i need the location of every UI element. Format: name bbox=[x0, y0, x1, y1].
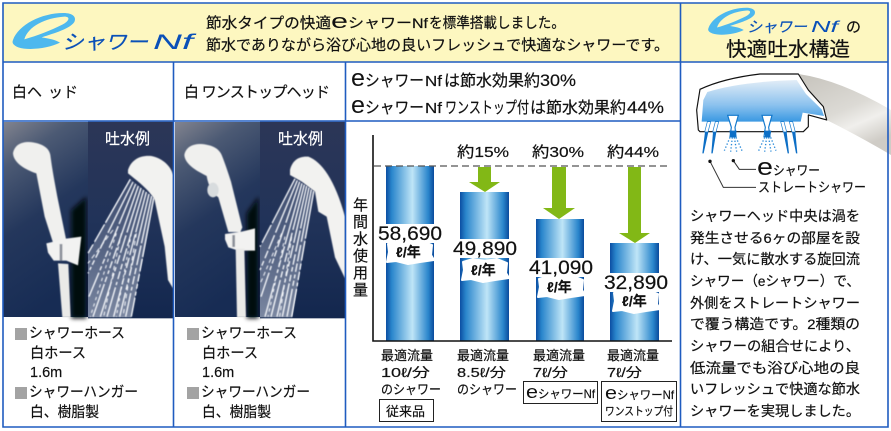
text: structure description: いフレッシュで快適な節水 bbox=[690, 381, 860, 397]
text: structure description: シャワーヘッド中央は渦を bbox=[690, 208, 860, 224]
value: 32,890: ℓ/年 bbox=[622, 293, 647, 309]
value: 58,690 bbox=[378, 224, 442, 264]
text: white head specs: 1.6m bbox=[30, 365, 62, 381]
panel: header banner bbox=[3, 3, 680, 62]
text: structure description: 発生させる6ヶの部屋を設 bbox=[690, 230, 860, 246]
text: water saving summary: 30% bbox=[540, 71, 576, 90]
icon: small logo: Nf bbox=[811, 19, 841, 36]
bar: 従来品 58,690 bbox=[386, 166, 434, 341]
label: 吐水例: 吐水例 bbox=[278, 130, 323, 148]
text: one-stop head specs: シャワーホース bbox=[201, 326, 297, 342]
arrow: 44% reduction bbox=[619, 167, 650, 243]
panel: right header bbox=[681, 3, 888, 62]
photo: white one-stop head shower bbox=[175, 122, 345, 318]
value: 49,890: ℓ/年 bbox=[471, 262, 496, 278]
label: 吐水例: 吐水例 bbox=[105, 130, 150, 148]
icon: gray handle bbox=[798, 74, 891, 155]
icon: spraying head bbox=[128, 156, 173, 288]
label: y axis title: 間 bbox=[353, 214, 368, 231]
label: eシャワーNf one-stop: e bbox=[605, 383, 617, 403]
text: one-stop head specs: シャワーハンガー bbox=[201, 384, 310, 401]
bar: eシャワーNf 41,090 bbox=[536, 219, 584, 341]
photo: white head shower bbox=[3, 122, 173, 318]
label: y axis title: 量 bbox=[353, 282, 368, 299]
leader lines bbox=[710, 161, 756, 187]
label: y axis title: 使 bbox=[353, 248, 368, 265]
text: water saving summary: Nf bbox=[425, 100, 443, 117]
label: conventional shower: のシャワー bbox=[381, 382, 441, 397]
label: eシャワー: e bbox=[757, 154, 773, 181]
text: one-stop head specs: 1.6m bbox=[202, 365, 234, 381]
text: white head specs: 白ホース bbox=[30, 345, 86, 362]
text: structure description: シャワーの組合せにより、 bbox=[690, 338, 860, 354]
text: structure description: 低流量でも浴び心地の良 bbox=[690, 360, 860, 376]
text: structure description: シャワー（eシャワー）で、 bbox=[690, 273, 860, 289]
label: y axis title: 用 bbox=[353, 265, 368, 282]
label: 8.5 L/min shower bbox=[457, 348, 517, 397]
label: conventional shower: 従来品 bbox=[386, 404, 425, 419]
label: eシャワーNf one-stop: 最適流量 bbox=[607, 348, 659, 363]
text: water saving summary: シャワー bbox=[365, 73, 424, 90]
icon: water chamber bbox=[702, 80, 824, 122]
label: eシャワーNf: 7ℓ/分 bbox=[533, 365, 568, 380]
text: water saving summary: は節水効果約 bbox=[444, 72, 540, 90]
text: header description: e bbox=[331, 11, 348, 33]
label: eシャワーNf: シャワーNf bbox=[538, 387, 596, 401]
label: y axis title: 水 bbox=[353, 231, 368, 248]
text: water saving summary: e bbox=[351, 92, 365, 119]
text: header description: シャワーNf bbox=[348, 15, 428, 31]
value: 49,890: 49,890 bbox=[453, 239, 517, 260]
text: header description: を標準搭載しました。 bbox=[429, 14, 565, 32]
text: header description: 節水でありながら浴び心地の良いフレッシュで快適なシャワーです。 bbox=[206, 37, 669, 54]
text: one-stop head specs: 白、樹脂製 bbox=[202, 404, 271, 421]
value: 41,090: ℓ/年 bbox=[547, 279, 572, 295]
arrow: 30% reduction bbox=[543, 167, 575, 219]
label: y axis title bbox=[353, 197, 368, 299]
value: 41,090: 41,090 bbox=[529, 258, 593, 279]
label: eシャワーNf bbox=[524, 348, 598, 404]
icon: spray dots bbox=[724, 137, 776, 152]
text: water saving summary: Nf bbox=[425, 73, 443, 90]
icon: small logo: の bbox=[846, 19, 861, 36]
text: one-stop head specs: 白ホース bbox=[202, 345, 258, 362]
axis lines bbox=[373, 135, 672, 341]
text: water saving summary: e bbox=[351, 65, 365, 92]
icon: eシャワーNf logo bbox=[13, 13, 197, 54]
value: 41,090 bbox=[529, 258, 593, 299]
icon: shower head and hanger bbox=[13, 142, 81, 317]
heading: 白ヘッド: 白ヘ ッド bbox=[12, 84, 78, 101]
icon: water spray bbox=[88, 178, 155, 317]
diagram: shower head cross-section bbox=[697, 74, 891, 195]
text: water saving summary: は節水効果約 bbox=[530, 99, 626, 117]
text: water saving summary: シャワー bbox=[365, 100, 424, 117]
text: header description: 節水タイプの快適 bbox=[206, 15, 331, 32]
text: structure description: け、一気に散水する旋回流 bbox=[690, 251, 860, 267]
text: white head specs: 白、樹脂製 bbox=[30, 404, 99, 421]
label: y axis title: 年 bbox=[353, 197, 368, 214]
icon: head outline bbox=[697, 74, 827, 132]
icon: eシャワーNf logo: Nf bbox=[153, 31, 197, 54]
value: 49,890 bbox=[453, 239, 517, 282]
label: 8.5 L/min shower: 最適流量 bbox=[457, 348, 509, 363]
icon: eシャワーNf logo: シャワー bbox=[62, 32, 149, 54]
text: water saving summary: ワンストップ付 bbox=[445, 99, 529, 117]
heading: 白ワンストップヘッド: 白 ワンストップヘッド bbox=[184, 84, 330, 101]
text: white head specs bbox=[15, 326, 138, 421]
text: white head specs: シャワーホース bbox=[29, 326, 125, 342]
icon: swirl nozzles bbox=[728, 115, 772, 137]
bar: 8.5 L/min 49,890 bbox=[460, 192, 509, 341]
text: header description bbox=[206, 11, 669, 54]
label: eシャワーNf: 最適流量 bbox=[533, 348, 585, 363]
label: eシャワーNf one-stop: 7ℓ/分 bbox=[607, 365, 642, 380]
bar: one-stop 32,890 bbox=[610, 243, 659, 341]
icon: straight jets bbox=[702, 122, 797, 153]
heading: 快適吐水構造: 快適吐水構造 bbox=[726, 38, 850, 61]
label: eシャワーNf one-stop: シャワーNf bbox=[617, 388, 675, 402]
text: water saving summary: 44% bbox=[627, 98, 664, 117]
value: 58,690: 58,690 bbox=[378, 224, 442, 245]
icon: small logo: シャワー bbox=[747, 19, 808, 36]
label: 8.5 L/min shower: のシャワー bbox=[457, 382, 517, 397]
label: eシャワー: シャワー bbox=[773, 163, 820, 178]
text: structure description: 外側をストレートシャワー bbox=[690, 295, 860, 311]
value: 58,690: ℓ/年 bbox=[396, 244, 421, 260]
label: percent reductions: 約15% bbox=[457, 144, 509, 161]
chart: annual water use bbox=[353, 135, 676, 422]
text: one-stop head specs bbox=[187, 326, 310, 421]
label: conventional shower bbox=[380, 348, 441, 422]
label: ストレートシャワー: ストレートシャワー bbox=[758, 180, 866, 195]
text: white head specs: シャワーハンガー bbox=[29, 384, 138, 401]
icon: water spray bbox=[260, 178, 315, 317]
label: eシャワーNf one-stop: ワンストップ付 bbox=[605, 405, 673, 418]
label: conventional shower: 最適流量 bbox=[381, 348, 433, 363]
text: water saving summary bbox=[351, 65, 664, 119]
text: structure description: シャワーを実現しました。 bbox=[690, 403, 860, 419]
label: eシャワーNf one-stop bbox=[602, 348, 676, 422]
text: structure description bbox=[690, 208, 860, 419]
text: structure description: で覆う構造です。2種類の bbox=[690, 316, 860, 332]
icon: small logo bbox=[708, 8, 861, 36]
label: percent reductions bbox=[457, 144, 659, 161]
value: 32,890: 32,890 bbox=[604, 273, 668, 294]
label: conventional shower: 10ℓ/分 bbox=[381, 365, 430, 380]
icon: shower head with stop button bbox=[184, 144, 255, 317]
label: eシャワー bbox=[757, 154, 820, 181]
baseline: reference dashed line bbox=[374, 165, 668, 167]
icon: spraying head bbox=[290, 157, 345, 278]
label: percent reductions: 約30% bbox=[532, 144, 584, 161]
label: 8.5 L/min shower: 8.5ℓ/分 bbox=[457, 365, 506, 380]
label: percent reductions: 約44% bbox=[607, 144, 659, 161]
label: eシャワーNf: e bbox=[526, 382, 538, 402]
value: 32,890 bbox=[604, 273, 668, 313]
arrow: 15% reduction bbox=[469, 167, 500, 192]
